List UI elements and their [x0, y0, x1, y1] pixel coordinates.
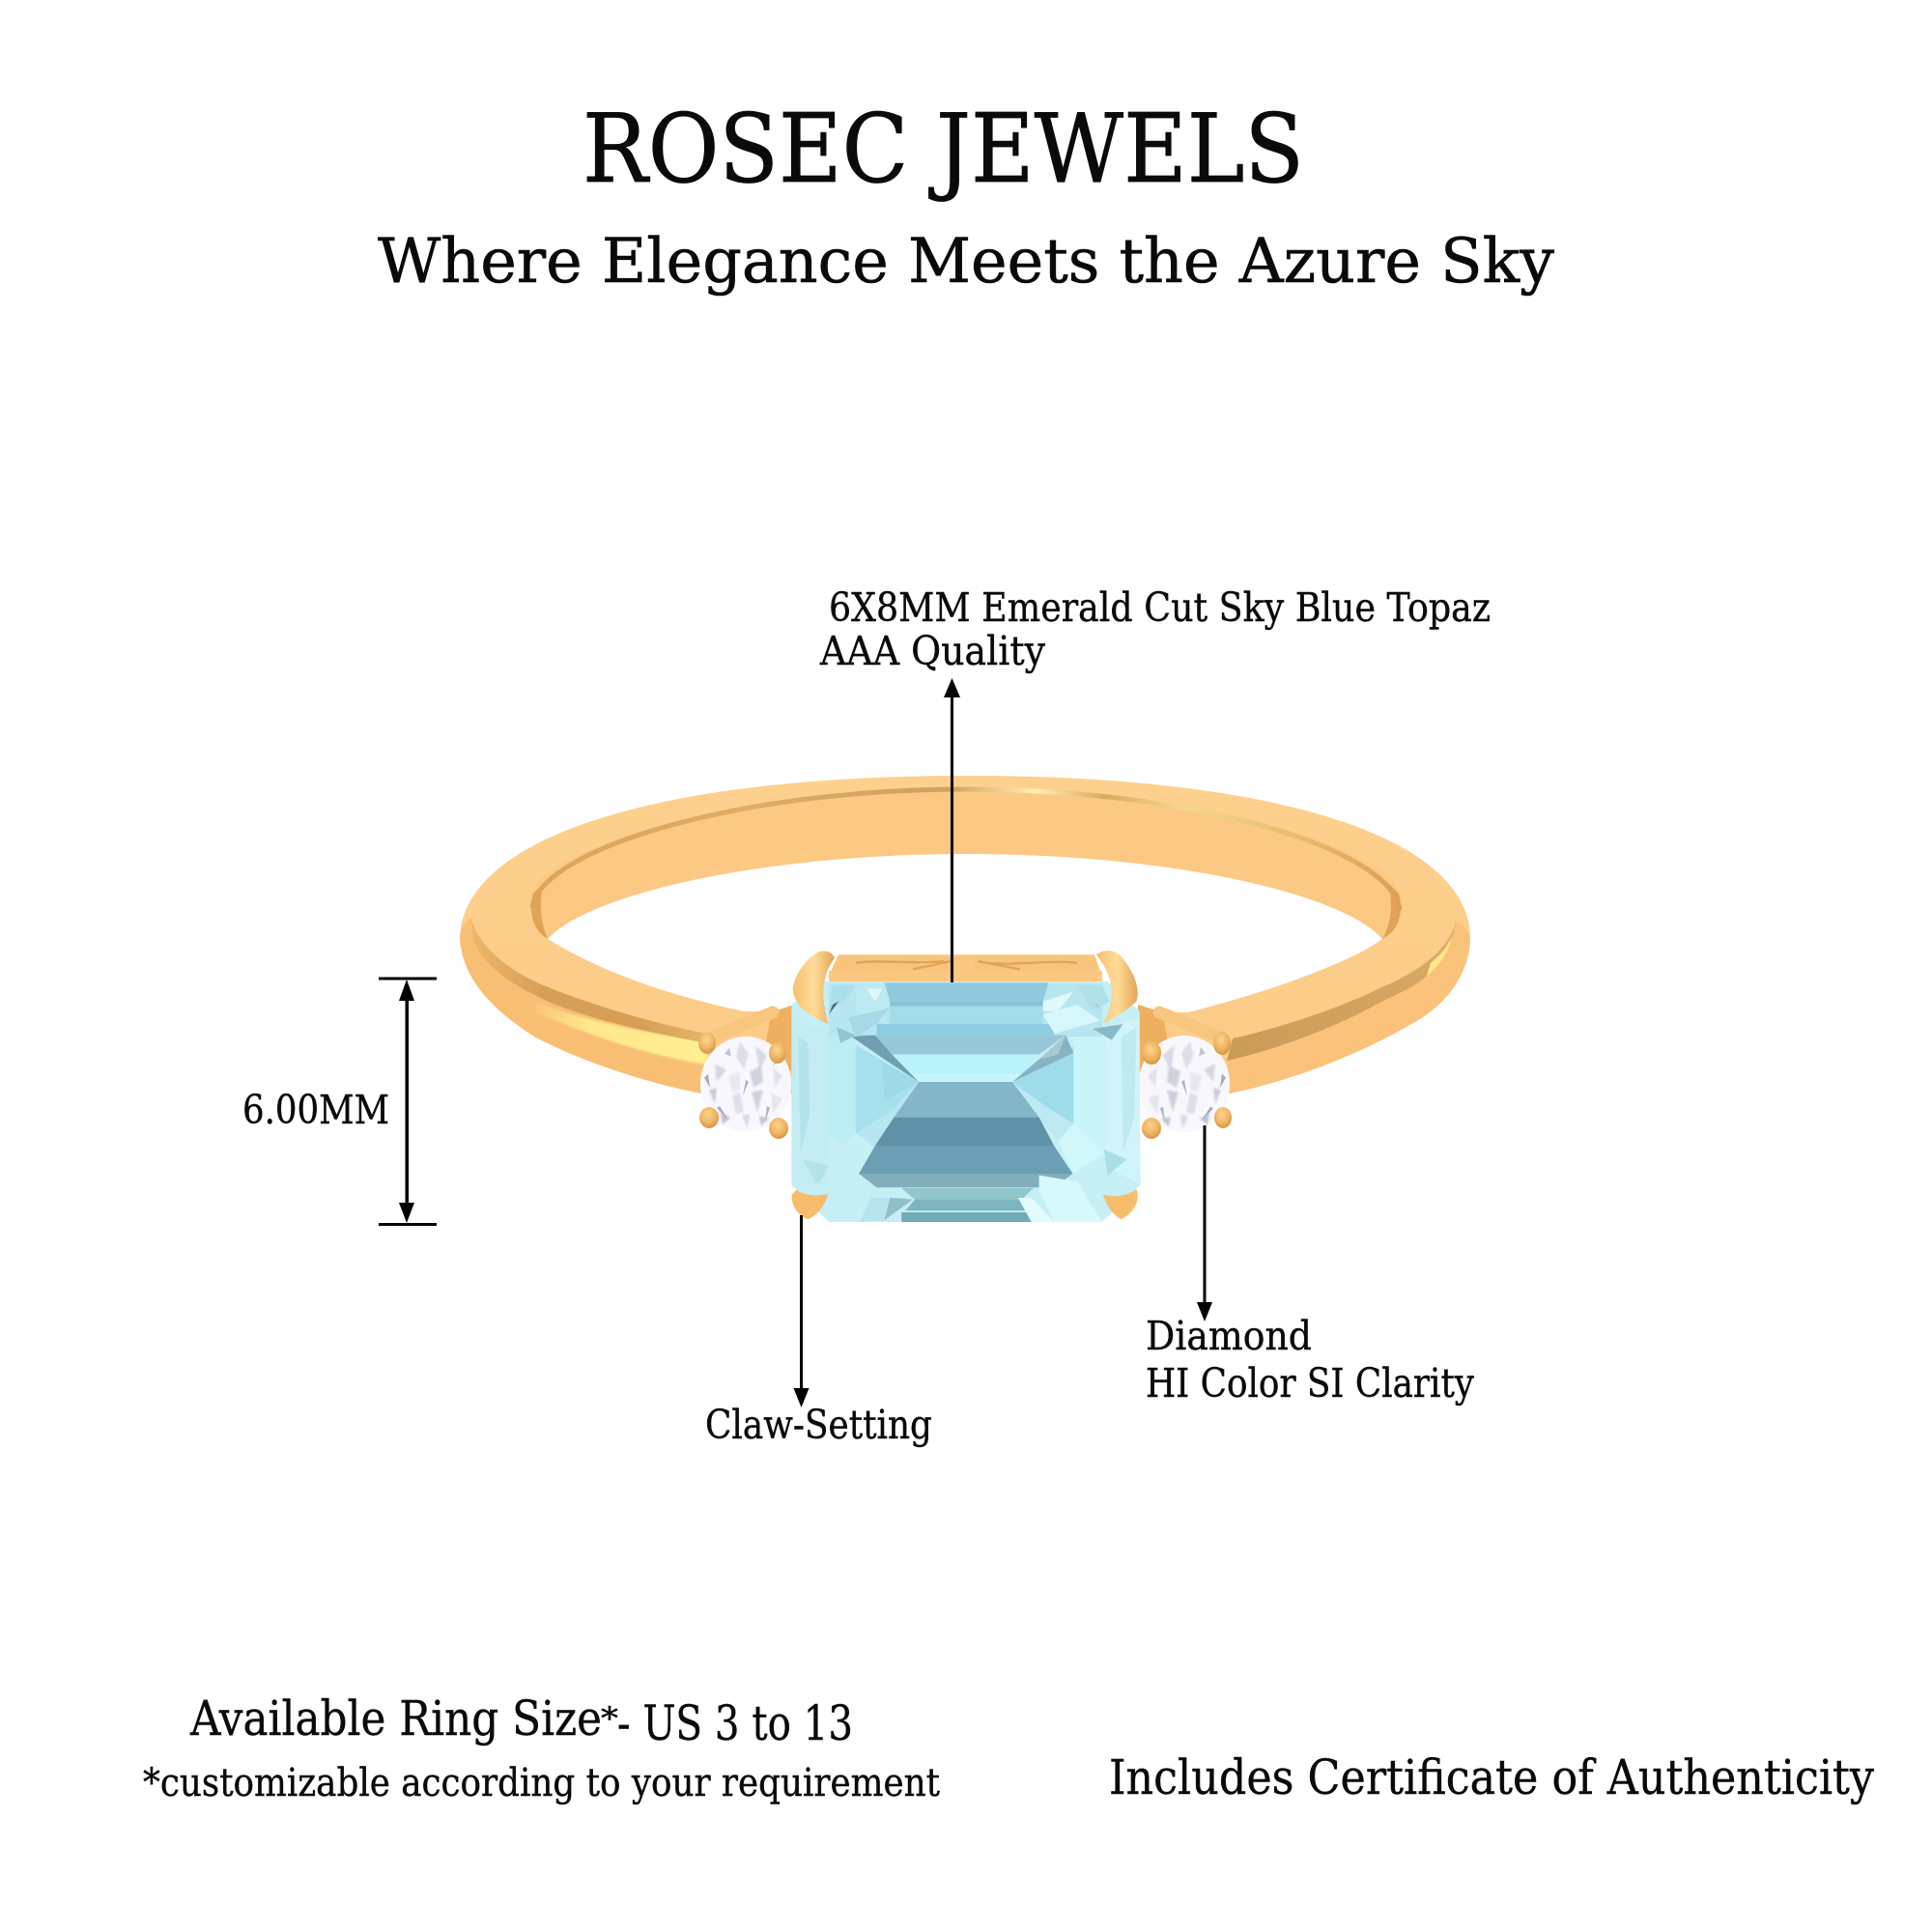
- ring size note: *: [601, 1700, 618, 1737]
- inner wall: [530, 789, 1402, 939]
- gem head basket: [829, 954, 1102, 981]
- ring band: [460, 776, 1470, 1094]
- subtitle: Where Elegance Meets the Azure Sky: [378, 226, 1554, 298]
- ring highlight left: [536, 1003, 710, 1065]
- ring illustration: [460, 776, 1470, 1222]
- callout: claw label: Claw-Setting: [705, 1402, 932, 1448]
- customizable note: *customizable according to your requirement: [143, 1761, 940, 1805]
- callout: topaz label: AAA Quality: [819, 628, 1046, 674]
- ring hole: [548, 854, 1382, 1012]
- callout: topaz label: 6X8MM Emerald Cut Sky Blue Topaz: [829, 584, 1491, 631]
- right diamond: [1139, 1036, 1230, 1132]
- callout: diamond label: HI Color SI Clarity: [1146, 1360, 1475, 1406]
- diamond prongs: [698, 1032, 1232, 1139]
- ring lower face left: [460, 918, 707, 1094]
- emerald cut sky blue topaz: [791, 981, 1140, 1222]
- callout: claw arrow: [794, 1215, 810, 1407]
- callout: topaz label: [819, 584, 1491, 674]
- dimension label: 6.00MM: [242, 1087, 389, 1133]
- callout: diamond arrow: [1197, 1125, 1212, 1321]
- ring lower face right: [1227, 921, 1470, 1094]
- ring size note: Available Ring Size: [189, 1690, 602, 1747]
- side settings: [711, 1005, 1221, 1072]
- ring groove right: [1227, 921, 1456, 1061]
- ring groove left: [471, 918, 707, 1043]
- left diamond: [700, 1037, 791, 1131]
- inner lip line: [532, 789, 1400, 910]
- inner wall side shade: [531, 884, 1401, 939]
- callout: diamond label: [1146, 1313, 1475, 1406]
- gem claws: [792, 951, 1138, 1219]
- callout: topaz arrow: [944, 678, 960, 982]
- ring size note: [189, 1690, 853, 1751]
- title: ROSEC JEWELS: [582, 95, 1304, 205]
- dimension: ring width arrow: [379, 978, 437, 1226]
- ring highlight right: [1427, 937, 1452, 976]
- callout: diamond label: Diamond: [1146, 1313, 1312, 1359]
- ring size note: - US 3 to 13: [617, 1695, 853, 1751]
